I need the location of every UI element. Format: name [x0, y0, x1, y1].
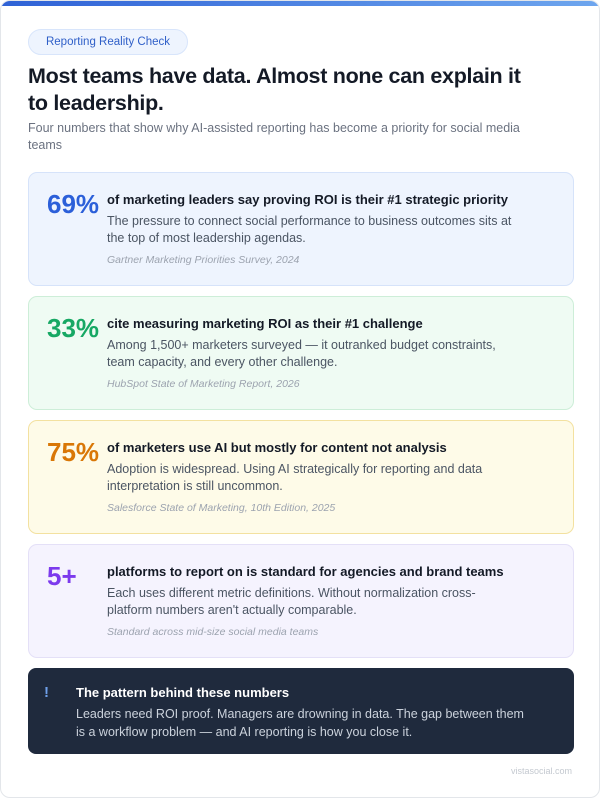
- stat text: of marketers use AI but mostly for content not analysis: [107, 440, 447, 455]
- callout: pattern: Leaders need ROI proof. Managers are drowning in data. The gap between them is a workflow problem — and AI reporting is how you close it.: [76, 707, 524, 739]
- stat text: Each uses different metric definitions. Without normalization cross-platform numbers aren't actually comparable.: [107, 586, 476, 617]
- callout: pattern: [28, 668, 574, 754]
- stat number: 5+: [47, 561, 77, 591]
- panel: 5+: [28, 544, 574, 658]
- stat text: platforms to report on is standard for agencies and brand teams: [107, 564, 504, 579]
- stat text: Among 1,500+ marketers surveyed — it outranked budget constraints, team capacity, and every other challenge.: [107, 338, 496, 369]
- stat text: Salesforce State of Marketing, 10th Edition, 2025: [107, 502, 335, 514]
- callout: pattern: The pattern behind these numbers: [76, 685, 289, 700]
- stat text: cite measuring marketing ROI as their #1 challenge: [107, 316, 423, 331]
- pill tag: Reporting Reality Check: [46, 36, 170, 48]
- stat text: [107, 440, 482, 514]
- stat text: [107, 316, 496, 390]
- pill tag: [28, 29, 188, 55]
- panel: 33%: [28, 296, 574, 410]
- stat number: 69%: [47, 189, 99, 219]
- stat text: Adoption is widespread. Using AI strategically for reporting and data interpretation is still uncommon.: [107, 462, 482, 493]
- icon: exclamation: !: [44, 684, 49, 701]
- panel: 75%: [28, 420, 574, 534]
- footer: vistasocial.com: [511, 766, 572, 776]
- stat text: Standard across mid-size social media teams: [107, 626, 318, 638]
- stat text: [107, 192, 512, 266]
- subtitle: Four numbers that show why AI-assisted reporting has become a priority for social media teams: [28, 121, 520, 152]
- stat text: of marketing leaders say proving ROI is their #1 strategic priority: [107, 192, 508, 207]
- stat text: [107, 564, 504, 638]
- title: Most teams have data. Almost none can explain it to leadership.: [28, 64, 521, 115]
- stat text: HubSpot State of Marketing Report, 2026: [107, 378, 300, 390]
- stat text: Gartner Marketing Priorities Survey, 2024: [107, 254, 299, 266]
- stat number: 33%: [47, 313, 99, 343]
- stat number: 75%: [47, 437, 99, 467]
- stat text: The pressure to connect social performance to business outcomes sits at the top of most leadership agendas.: [107, 214, 511, 245]
- panel: 69%: [28, 172, 574, 286]
